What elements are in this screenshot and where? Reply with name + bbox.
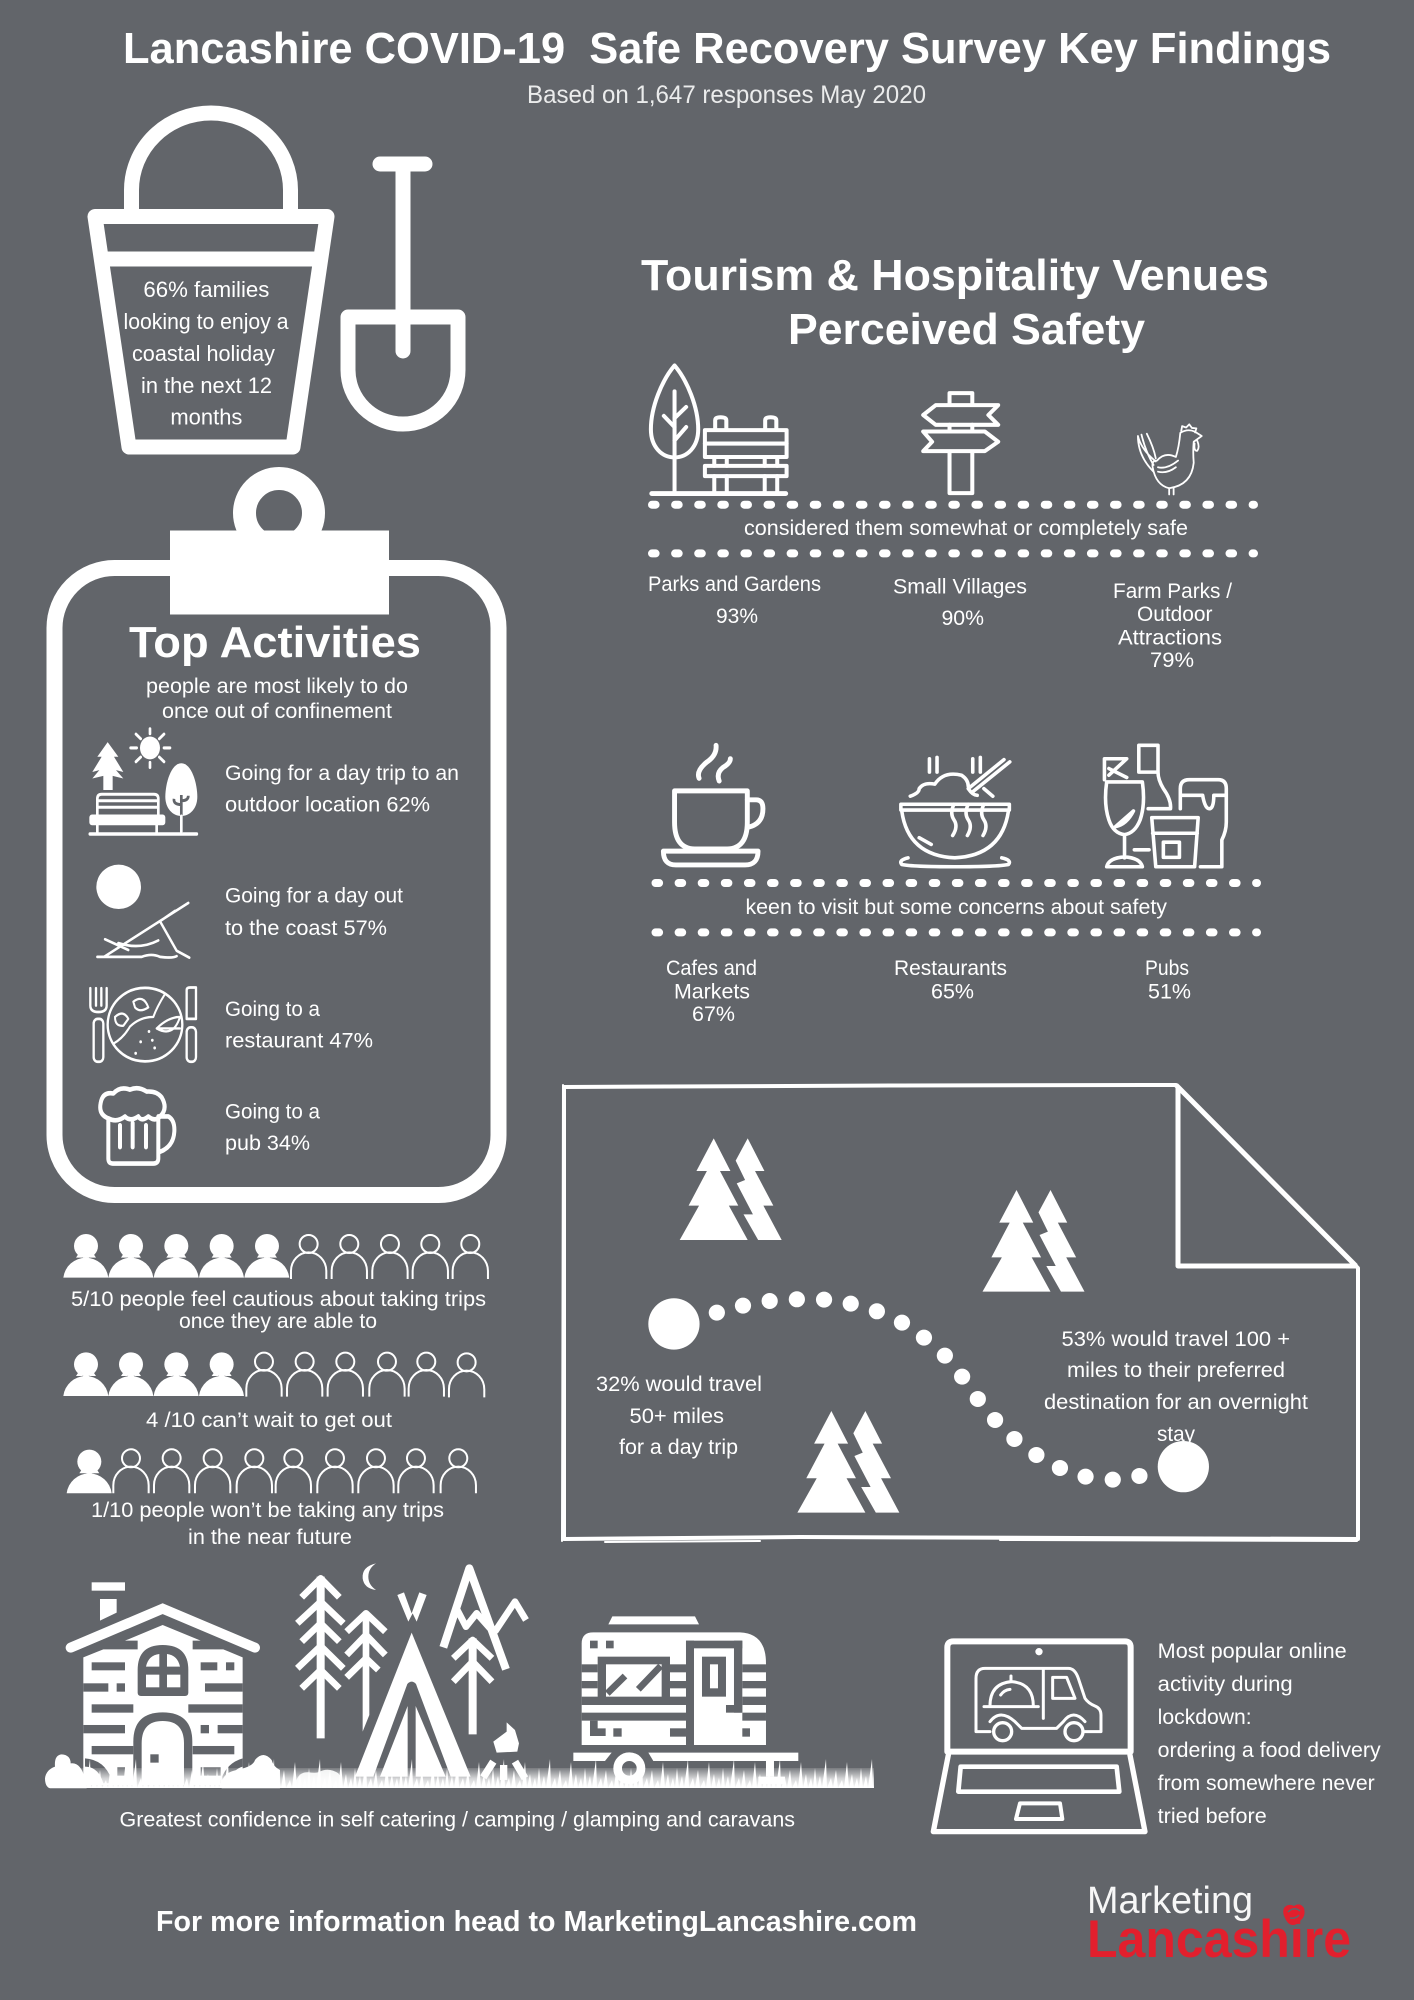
dotted line <box>652 549 1254 557</box>
subheading: people are most likely to do <box>146 675 408 698</box>
text: overnight stay: 53% would travel 100 + <box>1062 1328 1290 1351</box>
activity texts: pub 34% <box>225 1132 310 1155</box>
caption: 4 of 10: 4 /10 can’t wait to get out <box>146 1409 392 1432</box>
stat: cafes and markets: Markets <box>674 980 750 1004</box>
stat: farm parks: Outdoor <box>1137 603 1212 626</box>
icon: chicken <box>1138 424 1202 494</box>
icon: park with bench, tree and sun <box>89 729 197 834</box>
stat: restaurants <box>894 957 1007 1004</box>
icon: log cabin <box>71 1582 255 1785</box>
bucket text: 66% families <box>143 277 269 302</box>
bucket text: months <box>170 404 242 430</box>
clipboard clip <box>170 478 389 614</box>
icon: forest trees and moon <box>297 1563 526 1738</box>
dotted line <box>656 879 1257 887</box>
logo: Marketing Lancashire: Lancashire <box>1087 1910 1351 1969</box>
pictogram row: 1 of 10 <box>67 1449 476 1493</box>
stat: farm parks: Attractions <box>1118 626 1222 650</box>
text: day trip: for a day trip <box>619 1436 738 1459</box>
stat: cafes and markets <box>666 957 757 1026</box>
stat: small villages: 90% <box>942 607 984 630</box>
text: online activity: ordering a food delivery <box>1158 1739 1381 1762</box>
icon: bowl of food <box>901 757 1010 867</box>
stat: farm parks: 79% <box>1150 649 1194 672</box>
stat: cafes and markets: Cafes and <box>666 957 757 980</box>
text: overnight stay <box>1044 1328 1308 1446</box>
activity texts: Going to a <box>225 998 320 1021</box>
text: online activity: tried before <box>1158 1805 1267 1828</box>
stat: pubs <box>1145 957 1191 1004</box>
caption: Greatest confidence in self catering / camping / glamping and caravans <box>120 1809 795 1832</box>
stat: pubs: 51% <box>1148 980 1191 1004</box>
caption: 5 of 10: once they are able to <box>179 1310 377 1333</box>
stat: parks and gardens: Parks and Gardens <box>648 573 821 596</box>
heading <box>641 251 1269 354</box>
icon: trees <box>680 1138 1085 1513</box>
activity texts <box>225 762 459 1155</box>
dotted line <box>656 928 1257 936</box>
icon: park tree and bench <box>651 365 787 494</box>
stat: restaurants: Restaurants <box>894 957 1007 980</box>
text: day trip: 50+ miles <box>630 1405 724 1428</box>
activity texts: restaurant 47% <box>225 1030 373 1053</box>
stat: parks and gardens: 93% <box>716 605 758 628</box>
caption: 5 of 10 <box>71 1288 486 1333</box>
text: online activity: from somewhere never <box>1158 1772 1375 1795</box>
stat: farm parks <box>1113 580 1232 672</box>
dotted line <box>652 501 1254 509</box>
stat: parks and gardens <box>648 573 821 628</box>
panel: bucket and spade <box>95 113 458 447</box>
activity texts: to the coast 57% <box>225 917 387 940</box>
text: overnight stay: destination for an overnight <box>1044 1391 1308 1414</box>
icon: bushes <box>45 1754 280 1788</box>
icon: plate with cutlery <box>90 987 196 1062</box>
pictogram row: 5 of 10 <box>63 1234 488 1279</box>
icon: rose <box>1283 1904 1305 1925</box>
text: online activity <box>1158 1640 1381 1828</box>
map sheet outline <box>562 1085 1358 1542</box>
caption: 1 of 10 <box>91 1499 444 1549</box>
panel: online activity laptop <box>933 1640 1381 1832</box>
text: online activity: lockdown: <box>1158 1706 1252 1729</box>
panel: travel distance map <box>562 1085 1358 1542</box>
clipboard board <box>54 568 498 1195</box>
activity texts: outdoor location 62% <box>225 794 430 816</box>
text: day trip: 32% would travel <box>596 1373 762 1396</box>
activity texts: Going for a day trip to an <box>225 762 459 785</box>
panel: top activities clipboard <box>54 478 498 1195</box>
icon: drinks <box>1104 745 1226 867</box>
icon: caravan <box>573 1616 798 1784</box>
stat: small villages: Small Villages <box>893 576 1027 599</box>
pictogram row: 4 of 10 <box>63 1352 484 1397</box>
route dots <box>648 1291 1209 1492</box>
icon: signpost <box>923 393 998 493</box>
stat: farm parks: Farm Parks / <box>1113 580 1232 603</box>
bucket text: coastal holiday <box>132 341 275 366</box>
text: day trip <box>596 1373 762 1459</box>
icon: sun and deck chair <box>96 865 189 958</box>
panel: accommodation scene <box>45 1563 874 1832</box>
text: overnight stay: stay <box>1157 1423 1195 1446</box>
icon: tent <box>355 1592 471 1777</box>
text: online activity: Most popular online <box>1158 1640 1347 1663</box>
caption: 1 of 10: 1/10 people won’t be taking any trips <box>91 1499 444 1522</box>
activity texts: Going to a <box>225 1101 320 1124</box>
footer call to action: For more information head to MarketingLancashire.com <box>156 1906 917 1938</box>
icon: spade <box>348 164 458 424</box>
bucket text: looking to enjoy a <box>124 309 289 334</box>
icon: coffee cup <box>663 745 763 865</box>
subheading: once out of confinement <box>162 700 392 723</box>
icon: laptop with delivery truck <box>933 1641 1145 1832</box>
subheading <box>146 675 408 723</box>
title: Lancashire COVID-19 Safe Recovery Survey Key Findings <box>123 24 1331 73</box>
icon: bucket <box>95 113 327 447</box>
caption: 5 of 10: 5/10 people feel cautious about taking trips <box>71 1288 486 1311</box>
activity texts: Going for a day out <box>225 884 403 908</box>
stat: restaurants: 65% <box>931 980 974 1004</box>
heading: Perceived Safety <box>788 305 1146 354</box>
bucket text: in the next 12 <box>141 373 272 398</box>
panel: people pictograms <box>63 1234 488 1549</box>
stat: small villages <box>893 576 1027 630</box>
subtitle: Based on 1,647 responses May 2020 <box>527 81 926 109</box>
panel: tourism and hospitality perceived safety <box>641 251 1269 1026</box>
stat: pubs: Pubs <box>1145 957 1189 980</box>
icon: beer mug <box>100 1088 174 1164</box>
ground grass <box>77 1756 874 1788</box>
logo: Marketing Lancashire <box>1087 1880 1351 1969</box>
caption: 1 of 10: in the near future <box>188 1526 352 1549</box>
heading: top activities: Top Activities <box>129 618 421 667</box>
logo: Marketing Lancashire: Marketing <box>1087 1880 1253 1922</box>
caption: considered safe: considered them somewhat or completely safe <box>744 517 1188 540</box>
text: online activity: activity during <box>1158 1673 1293 1696</box>
text: overnight stay: miles to their preferred <box>1067 1359 1285 1382</box>
caption: keen to visit: keen to visit but some concerns about safety <box>746 896 1167 919</box>
stat: cafes and markets: 67% <box>692 1003 735 1026</box>
icon: campfire <box>295 1722 525 1787</box>
heading: Tourism & Hospitality Venues <box>641 251 1269 300</box>
bucket text <box>124 277 289 430</box>
